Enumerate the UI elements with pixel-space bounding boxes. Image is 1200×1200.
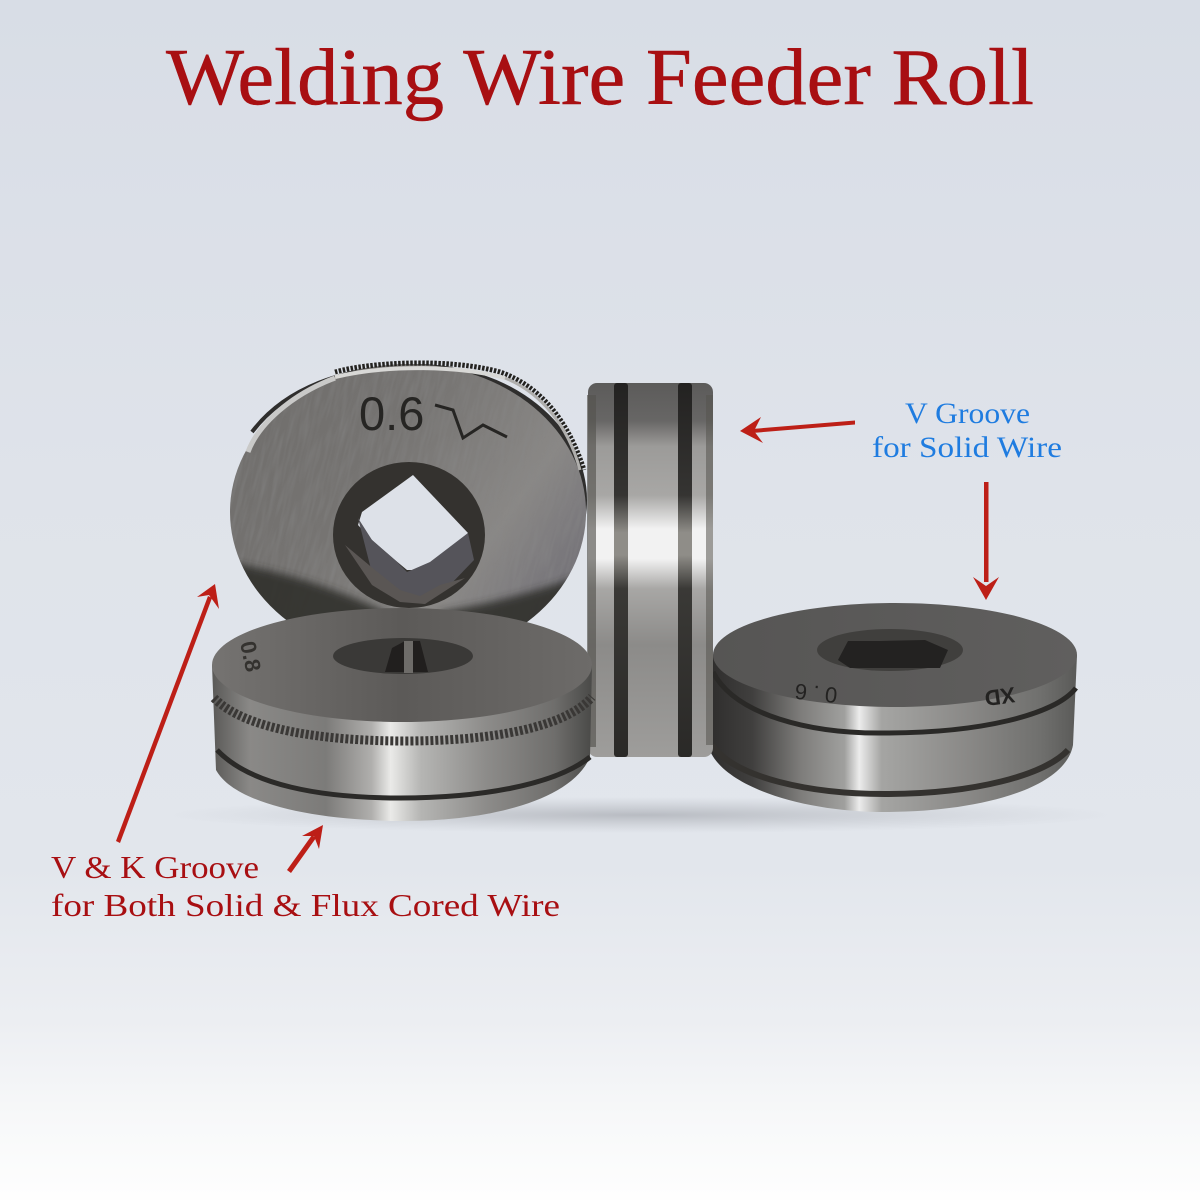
callout: V groove: for Solid Wire: [872, 431, 1062, 464]
roller: front left, lying flat with knurled groove: [212, 608, 592, 821]
callout: V groove: [872, 397, 1062, 464]
callout: V and K groove: for Both Solid & Flux Cored Wire: [51, 887, 560, 923]
engraved V mark: [435, 405, 507, 438]
callout: V groove: V Groove: [905, 397, 1030, 430]
engraved label 0.6: 0.6: [788, 678, 839, 708]
engraved label 0.6: 0.6: [359, 387, 424, 440]
roller: back left, upright with engraved face: [230, 360, 587, 622]
hexagonal bore: [817, 629, 963, 671]
arrow: to centre roller: [740, 417, 855, 443]
title: Welding Wire Feeder Roll: [166, 32, 1034, 122]
roller: right, lying flat: [708, 603, 1077, 812]
arrow: to right roller: [973, 482, 999, 600]
bore hole: [333, 462, 485, 608]
bore: [333, 638, 473, 674]
engraved label XD: XD: [983, 682, 1017, 711]
roller: centre, standing edge-on: [587, 383, 713, 757]
callout: V and K groove: [51, 849, 560, 923]
engraved label 0.8: 0.8: [235, 639, 266, 674]
arrow: to back left roller: [116, 584, 219, 843]
arrow: to front left roller: [287, 825, 323, 873]
callout: V and K groove: V & K Groove: [51, 849, 259, 885]
